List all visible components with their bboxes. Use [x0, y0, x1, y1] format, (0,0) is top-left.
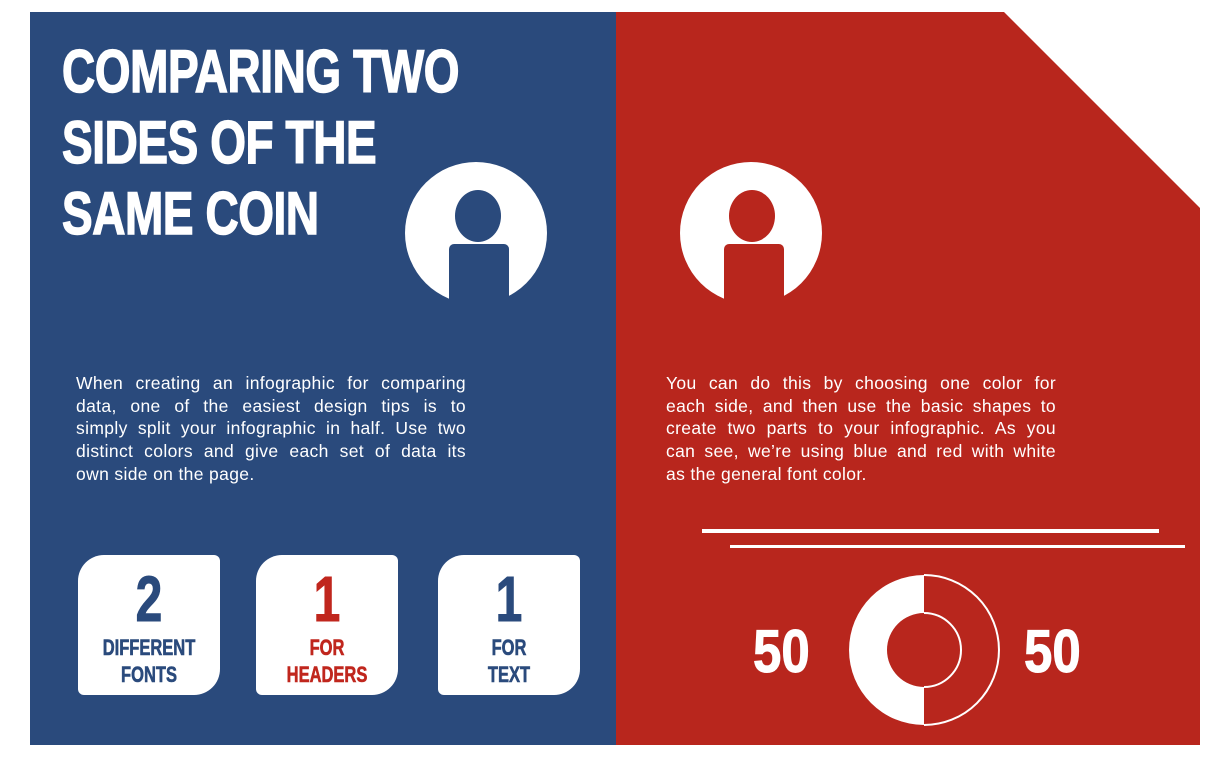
donut chart	[849, 574, 1000, 726]
card: 2 different fonts: DIFFERENT	[103, 635, 195, 660]
card: 1 for text: FOR	[492, 635, 526, 660]
title	[62, 38, 459, 247]
number: right 50: 50	[1024, 618, 1081, 685]
title: COMPARING TWO	[62, 38, 459, 105]
card: 2 different fonts: FONTS	[121, 662, 177, 687]
number: left 50: 50	[753, 618, 810, 685]
text block: red: as the general font color.	[666, 464, 867, 484]
text block: blue: own side on the page.	[76, 464, 255, 484]
text block: blue: simply split your infographic in half. Use two	[76, 418, 466, 438]
text block: red	[666, 373, 1056, 484]
panel: red side	[616, 12, 1200, 745]
card: 1 for headers: 1	[314, 563, 340, 635]
text block: blue: distinct colors and give each set of data its	[76, 441, 466, 461]
card: 1 for headers	[256, 555, 398, 695]
text block: blue: When creating an infographic for comparing	[76, 373, 466, 393]
card: 2 different fonts	[78, 555, 220, 695]
card: 1 for text	[438, 555, 580, 695]
card: 1 for headers: FOR	[310, 635, 344, 660]
card: 1 for text: 1	[496, 563, 522, 635]
text block: blue	[76, 373, 466, 484]
title: SAME COIN	[62, 180, 319, 247]
icon: blue avatar	[405, 162, 547, 299]
icon: red avatar	[680, 162, 822, 299]
card: 1 for text: TEXT	[488, 662, 530, 687]
text block: red: create two parts to your infographic. As you	[666, 418, 1056, 438]
panel: blue side	[30, 12, 616, 745]
card: 2 different fonts: 2	[136, 563, 162, 635]
text block: red: can see, we’re using blue and red with white	[666, 441, 1056, 461]
text block: red: You can do this by choosing one color for	[666, 373, 1056, 393]
title: SIDES OF THE	[62, 109, 376, 176]
text block: red: each side, and then use the basic shapes to	[666, 396, 1056, 416]
text block: blue: data, one of the easiest design tips is to	[76, 396, 466, 416]
card: 1 for headers: HEADERS	[287, 662, 367, 687]
lines	[702, 529, 1185, 548]
